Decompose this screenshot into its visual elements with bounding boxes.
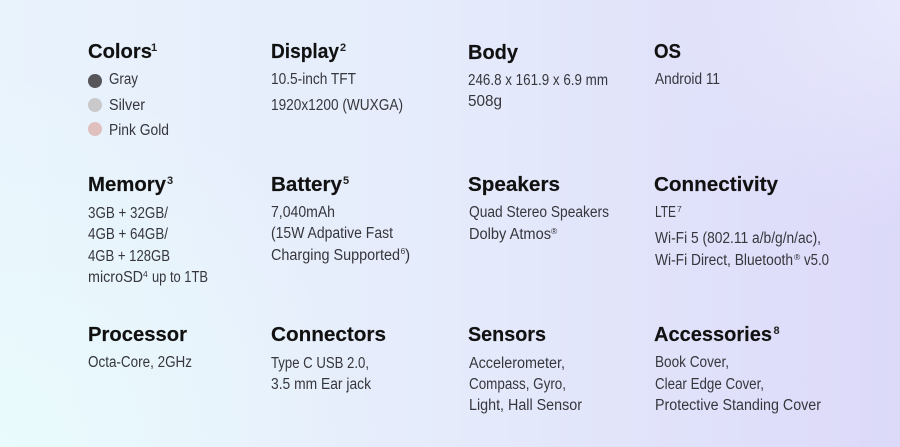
connectors details: Type C USB 2.0,: [271, 355, 369, 372]
display details: 10.5-inch TFT: [271, 71, 356, 88]
connectors details: 3.5 mm Ear jack: [271, 376, 371, 393]
heading: battery: Battery: [271, 173, 343, 196]
swatch: pink gold: Pink Gold: [109, 122, 169, 139]
memory details: microSD: [88, 269, 143, 286]
panel: colors: [88, 40, 169, 139]
heading: battery: 5: [343, 175, 349, 187]
accessories details: Protective Standing Cover: [655, 397, 821, 414]
sensors details: Compass, Gyro,: [469, 376, 566, 393]
sensors details: [469, 355, 582, 414]
battery details: 7,040mAh: [271, 204, 335, 221]
speakers details: ®: [551, 226, 558, 236]
os details: Android 11: [655, 71, 720, 88]
heading: body: Body: [468, 41, 519, 64]
display details: 1920x1200 (WUXGA): [271, 97, 403, 114]
body details: [468, 72, 608, 110]
sensors details: Light, Hall Sensor: [469, 397, 582, 414]
heading: accessories: 8: [774, 325, 780, 337]
heading: memory: 3: [167, 175, 173, 187]
swatch: gray: Gray: [109, 71, 138, 88]
panel: speakers: [468, 173, 609, 243]
connectivity details: Wi-Fi 5 (802.11 a/b/g/n/ac),: [655, 230, 821, 247]
connectivity details: [655, 204, 829, 269]
swatch: silver: Silver: [109, 97, 145, 114]
panel: body: [468, 41, 608, 110]
panel: connectors: [271, 323, 386, 393]
connectivity details: ®: [794, 252, 801, 262]
connectivity details: 7: [677, 204, 682, 214]
body details: 508g: [468, 93, 502, 110]
heading: memory: Memory: [88, 173, 167, 196]
memory details: 4: [143, 269, 148, 279]
panel: processor: [88, 323, 192, 371]
accessories details: Clear Edge Cover,: [655, 376, 764, 393]
battery details: [271, 204, 410, 264]
heading: colors: 1: [151, 42, 157, 54]
speakers details: Quad Stereo Speakers: [469, 204, 609, 221]
memory details: 4GB + 128GB: [88, 248, 170, 265]
battery details: ): [405, 247, 410, 264]
connectivity details: v5.0: [804, 252, 829, 269]
heading: display: 2: [340, 42, 346, 54]
accessories details: [655, 354, 821, 414]
accessories details: Book Cover,: [655, 354, 729, 371]
battery details: Charging Supported: [271, 247, 400, 264]
heading: processor: Processor: [88, 323, 187, 346]
connectivity details: Wi-Fi Direct, Bluetooth: [655, 252, 793, 269]
battery details: (15W Adpative Fast: [271, 225, 394, 242]
memory details: 3GB + 32GB/: [88, 205, 169, 222]
panel: accessories: [654, 323, 821, 414]
heading: os: OS: [654, 40, 681, 63]
heading: accessories: Accessories: [654, 323, 772, 346]
heading: colors: Colors: [88, 40, 152, 63]
processor details: Octa-Core, 2GHz: [88, 354, 192, 371]
heading: display: Display: [271, 40, 340, 63]
heading: speakers: Speakers: [468, 173, 560, 196]
heading: sensors: Sensors: [468, 323, 546, 346]
body details: 246.8 x 161.9 x 6.9 mm: [468, 72, 608, 89]
heading: connectivity: Connectivity: [654, 173, 779, 196]
speakers details: Dolby Atmos: [469, 226, 551, 243]
panel: os: [654, 40, 720, 88]
display details: [271, 71, 403, 114]
connectors details: [271, 355, 371, 393]
panel: battery: [271, 173, 410, 264]
panel: connectivity: [654, 173, 829, 269]
panel: display: [271, 40, 403, 114]
speakers details: [469, 204, 609, 243]
heading: connectors: Connectors: [271, 323, 386, 346]
memory details: up to 1TB: [152, 269, 208, 286]
memory details: [88, 205, 208, 286]
memory details: 4GB + 64GB/: [88, 226, 169, 243]
sensors details: Accelerometer,: [469, 355, 565, 372]
connectivity details: LTE: [655, 204, 676, 221]
panel: memory: [88, 173, 208, 286]
battery details: 6: [400, 246, 406, 256]
panel: sensors: [468, 323, 582, 414]
